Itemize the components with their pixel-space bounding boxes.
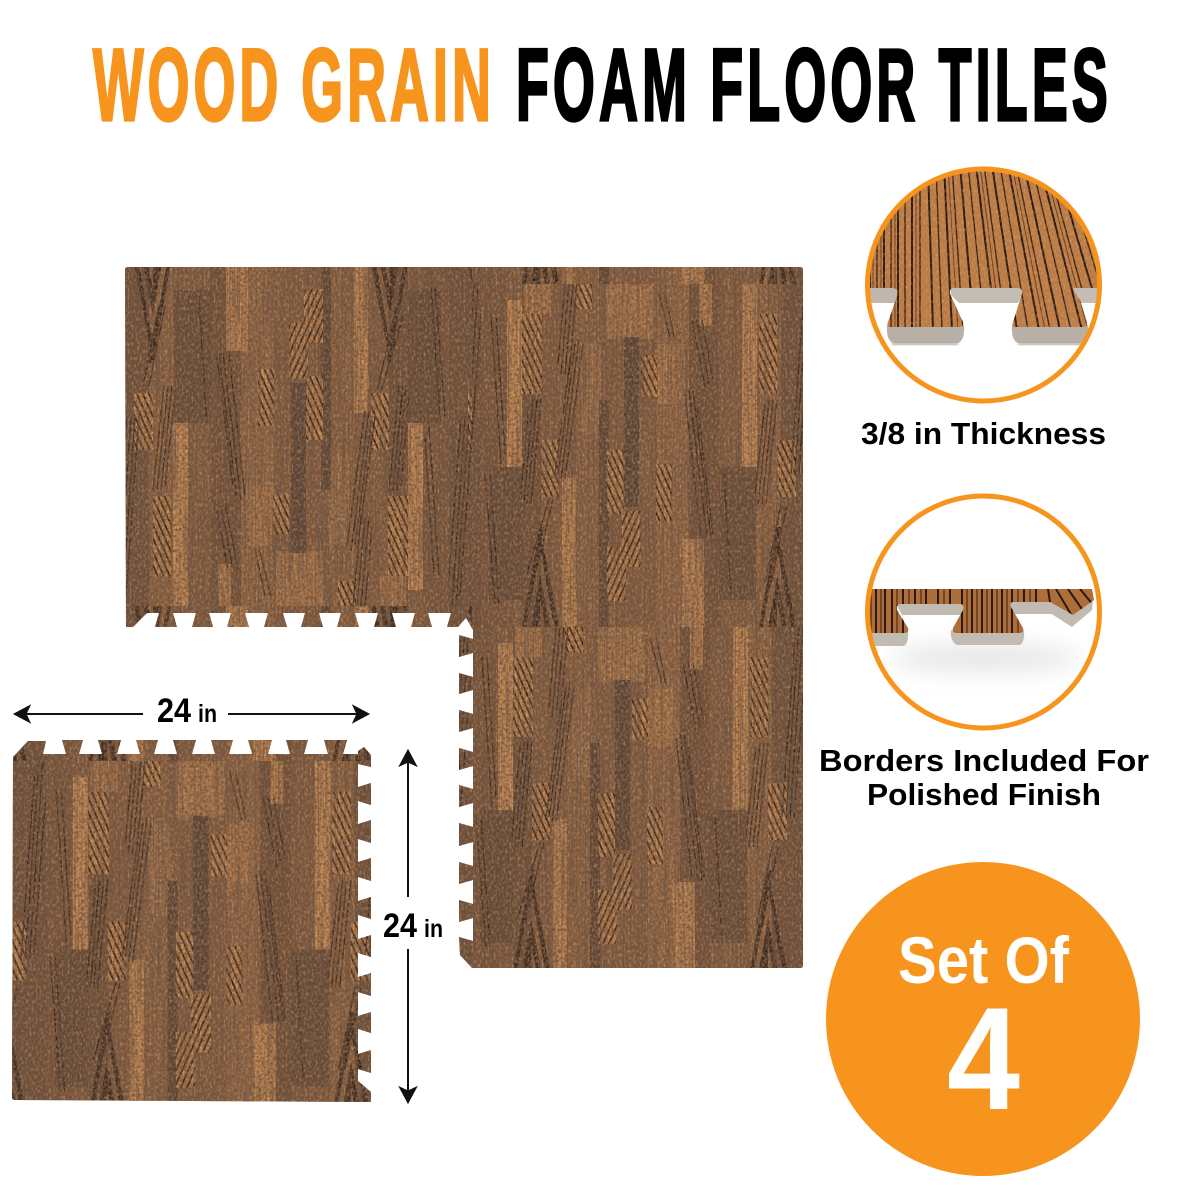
caption line 2: Polished Finish — [867, 777, 1101, 812]
notch wall right — [1073, 288, 1097, 303]
title — [93, 28, 1112, 142]
arrow: width left — [15, 706, 143, 722]
height dimension: 24 in — [383, 751, 443, 1102]
badge: set of 4 — [826, 862, 1140, 1176]
detail circle: thickness — [865, 166, 1102, 404]
caption: thickness: 3/8 in Thickness — [861, 416, 1106, 451]
detail circle: borders — [860, 496, 1100, 728]
badge circle — [826, 862, 1140, 1176]
single wood grain tile — [10, 738, 374, 1104]
label: width value: 24 — [157, 692, 191, 730]
label: width unit: in — [198, 700, 217, 728]
tooth side right — [1012, 325, 1088, 343]
circle ring — [868, 169, 1100, 401]
arrow: height up — [400, 751, 416, 897]
border wood surface — [870, 589, 1094, 633]
label: height value: 24 — [383, 907, 417, 945]
assembled wood grain tiles, L shape — [120, 260, 810, 972]
arrow: height down — [400, 949, 416, 1102]
title: wood grain: WOOD GRAIN — [93, 28, 495, 142]
badge number: 4 — [947, 977, 1020, 1140]
caption line 1: Borders Included For — [819, 743, 1149, 778]
arrow: width right — [228, 706, 368, 722]
circle ring — [868, 496, 1100, 728]
label: height unit: in — [424, 915, 443, 943]
badge text: Set Of — [898, 923, 1070, 997]
notch wall left — [870, 288, 898, 303]
width dimension: 24 in — [15, 692, 368, 730]
border side faces — [865, 600, 1093, 646]
notch wall centre — [950, 288, 1023, 303]
wood surface — [870, 172, 1097, 327]
caption: borders — [819, 743, 1149, 812]
tooth side left — [887, 325, 964, 343]
